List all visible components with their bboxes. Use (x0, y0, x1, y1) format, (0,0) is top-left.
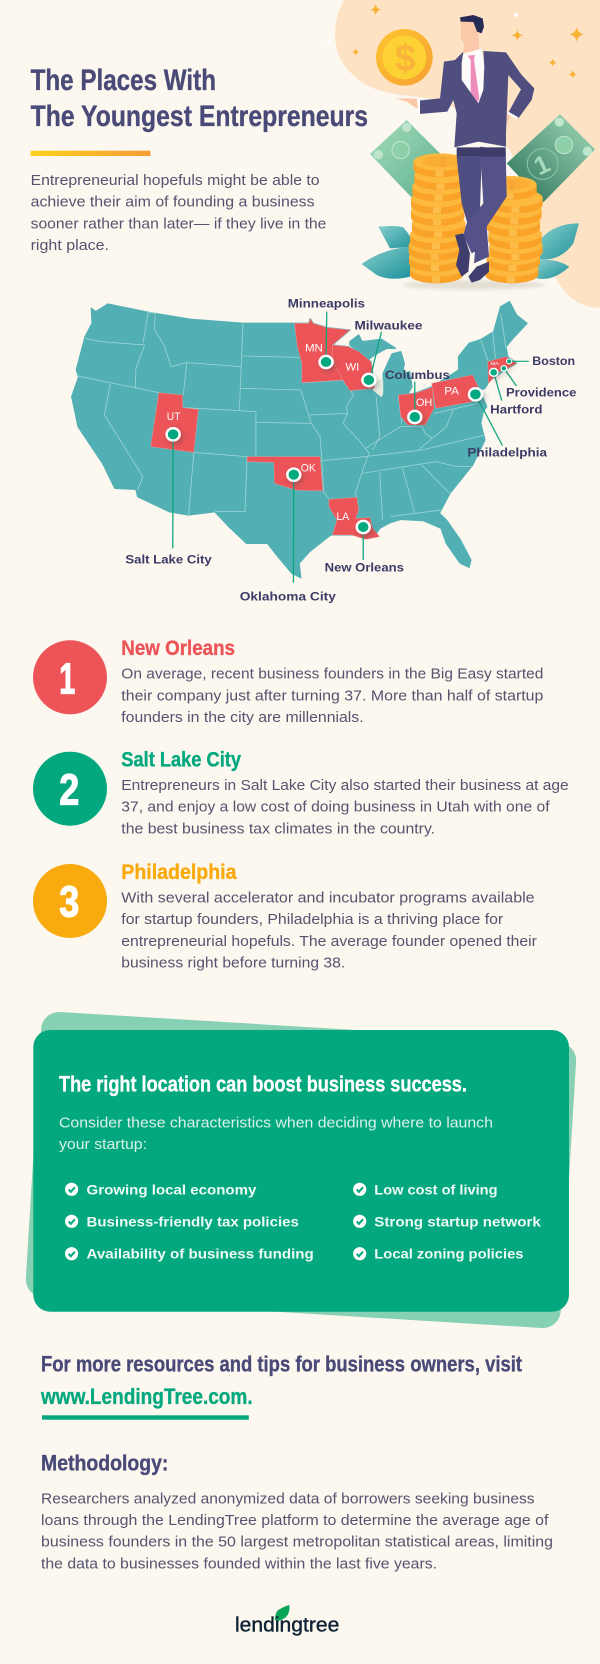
businessman figure (395, 15, 534, 283)
title (31, 64, 368, 133)
check icons (65, 1183, 366, 1260)
badge: number 3: 3 (59, 878, 79, 927)
checklist items: Growing local economy (86, 1181, 257, 1197)
map: leader lines (173, 312, 529, 583)
body text (121, 778, 569, 837)
body text: the best business tax climates in the country. (121, 821, 435, 837)
badge: number 2 (33, 752, 107, 826)
badge: number 1: 1 (59, 654, 75, 703)
ground shadow (402, 280, 545, 290)
title accent bar (31, 151, 150, 156)
intro paragraph (31, 173, 326, 254)
state: Utah (151, 393, 198, 452)
body text: entrepreneurial hopefuls. The average founder opened their (121, 934, 537, 950)
card intro text (59, 1115, 493, 1153)
methodology heading: Methodology: (41, 1451, 168, 1476)
map: state abbreviations: MA (491, 361, 500, 367)
map: city labels: Minneapolis (288, 297, 365, 311)
card intro text: Consider these characteristics when deciding where to launch (59, 1115, 493, 1131)
map: state abbreviations: OK (301, 462, 316, 475)
gold dollar coin (376, 29, 433, 86)
map: highlighted states (151, 319, 516, 539)
map: state borders (76, 312, 506, 520)
methodology text: Researchers analyzed anonymized data of borrowers seeking business (41, 1491, 535, 1507)
map: city labels: Hartford (490, 403, 542, 416)
badge: number 2: 2 (59, 765, 79, 814)
right coin stack (483, 176, 543, 283)
map: Lake Michigan shade (373, 380, 383, 397)
map: state abbreviations: PA (444, 385, 459, 397)
right dollar bill (507, 114, 595, 202)
checklist items (86, 1181, 541, 1262)
checklist items: Local zoning policies (374, 1246, 524, 1262)
state: Oklahoma (247, 457, 323, 491)
methodology text (41, 1491, 553, 1572)
body text: founders in the city are millennials. (121, 710, 364, 726)
ranking 3: Philadelphia (33, 860, 537, 972)
map: city pins (165, 355, 512, 534)
card heading: The right location can boost business success. (59, 1072, 467, 1097)
methodology text: business founders in the 50 largest metropolitan statistical areas, limiting (41, 1535, 553, 1551)
map: city pin centers (168, 357, 511, 532)
badge: number 1 (33, 640, 107, 714)
checklist items: Business-friendly tax policies (86, 1213, 299, 1229)
body text: On average, recent business founders in the Big Easy started (121, 666, 543, 682)
body text: Entrepreneurs in Salt Lake City also started their business at age (121, 778, 569, 794)
map: city labels: Salt Lake City (125, 553, 212, 567)
ranking 2: Salt Lake City (33, 748, 569, 837)
resources call to action: For more resources and tips for business owners, visit (41, 1352, 523, 1377)
map: city labels: Oklahoma City (240, 590, 336, 604)
map: state abbreviations: OH (416, 396, 432, 409)
title: The Places With (31, 64, 216, 97)
map: city labels (125, 297, 577, 604)
state: Massachusetts, Connecticut, Rhode Island (488, 357, 516, 383)
intro paragraph: right place. (31, 238, 109, 254)
teal leaves (362, 223, 579, 279)
checklist items: Strong startup network (374, 1213, 541, 1229)
sparkle stars (326, 4, 584, 79)
map: city labels: Boston (532, 354, 575, 368)
body text: business right before turning 38. (121, 956, 345, 972)
body text: 37, and enjoy a low cost of doing business in Utah with one of (121, 800, 551, 816)
background blob: peach (335, 0, 600, 308)
heading: New Orleans: New Orleans (121, 636, 235, 660)
heading: Philadelphia: Philadelphia (121, 860, 237, 884)
panel: location checklist (25, 1011, 577, 1329)
intro paragraph: sooner rather than later— if they live in the (31, 216, 326, 232)
left coin stack (409, 153, 468, 283)
link underline (42, 1415, 249, 1420)
body text (121, 666, 543, 726)
map: city labels: Milwaukee (354, 319, 423, 332)
intro paragraph: Entrepreneurial hopefuls might be able to (31, 173, 320, 189)
map: state abbreviations (167, 342, 500, 523)
methodology text: loans through the LendingTree platform to determine the average age of (41, 1513, 549, 1529)
badge: number 3 (33, 864, 107, 938)
map: state abbreviations: UT (167, 410, 180, 423)
body text: for startup founders, Philadelphia is a thriving place for (121, 912, 503, 928)
right dollar bill: 1 (530, 150, 554, 181)
checklist items: Low cost of living (374, 1181, 498, 1197)
state: Louisiana (329, 497, 380, 539)
body text: With several accelerator and incubator programs available (121, 890, 535, 906)
LendingTree logo: lendingtree (235, 1615, 339, 1637)
map: state abbreviations: MN (305, 342, 323, 355)
body text: their company just after turning 37. More than half of startup (121, 688, 543, 704)
state: Ohio (398, 387, 434, 425)
front card (33, 1030, 569, 1312)
map: city labels: Philadelphia (467, 446, 547, 459)
title: The Youngest Entrepreneurs (31, 100, 368, 133)
methodology text: the data to businesses founded within the last five years. (41, 1556, 437, 1572)
resources call to action (40, 1352, 523, 1409)
hero illustration: businessman on coin stacks (326, 4, 595, 290)
left coin stack: $ (440, 156, 447, 170)
map: base landmass (72, 302, 527, 578)
state: Wisconsin (332, 345, 374, 391)
map: city labels: Columbus (385, 368, 450, 382)
left dollar bill (370, 120, 467, 217)
ranking 1: New Orleans (33, 636, 543, 726)
state: Pennsylvania (432, 375, 480, 408)
LendingTree logo (235, 1605, 339, 1637)
right coin stack: $ (508, 178, 515, 192)
US map with city markers (72, 297, 577, 604)
map: city labels: New Orleans (325, 561, 404, 574)
checklist items: Availability of business funding (86, 1246, 314, 1262)
map: state abbreviations: WI (345, 361, 359, 374)
resources call to action: www.LendingTree.com. (40, 1384, 253, 1409)
map: state abbreviations: LA (337, 510, 349, 523)
intro paragraph: achieve their aim of founding a business (31, 195, 315, 211)
body text (121, 890, 537, 972)
tilted back card (25, 1011, 577, 1329)
heading: Salt Lake City: Salt Lake City (121, 748, 241, 772)
map: city labels: Providence (506, 386, 577, 399)
gold dollar coin: $ (395, 37, 416, 79)
card intro text: your startup: (59, 1137, 147, 1153)
state: Minnesota (294, 319, 350, 383)
